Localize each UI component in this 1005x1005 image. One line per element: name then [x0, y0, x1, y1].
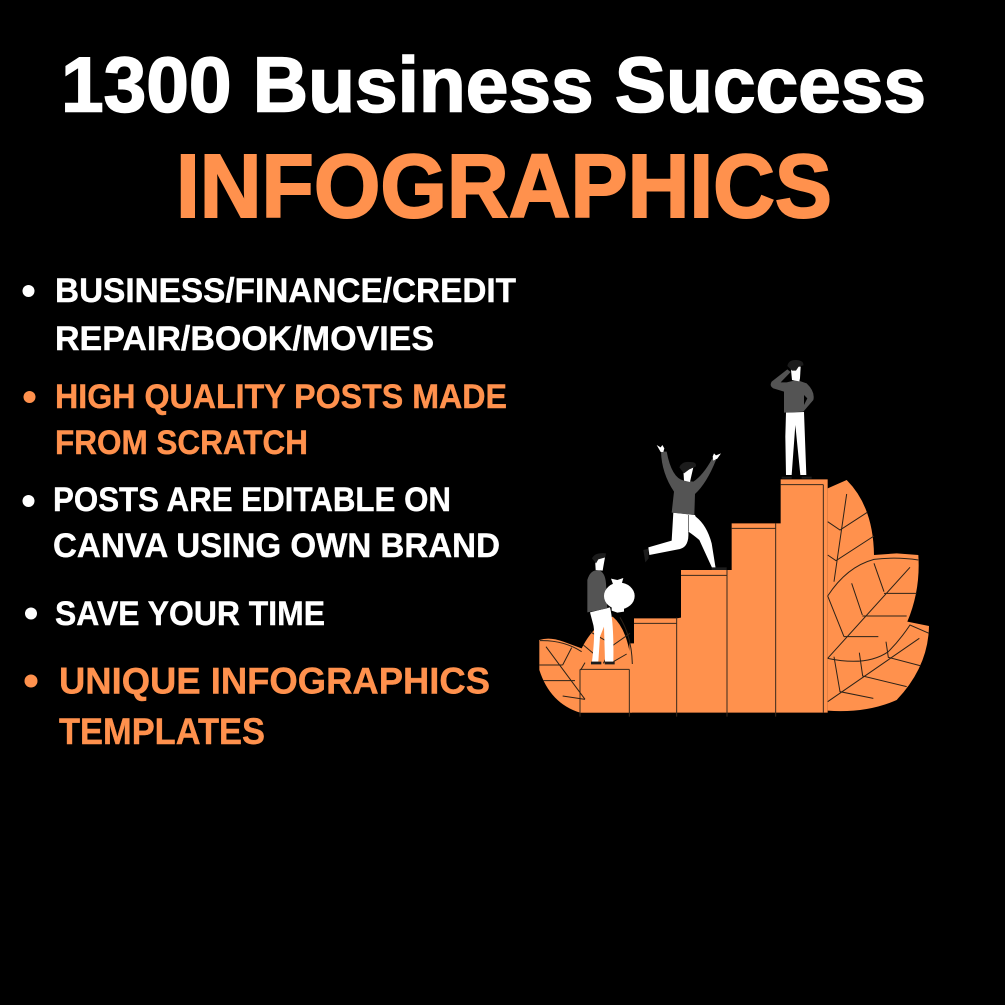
icon: money bag [604, 578, 635, 613]
person: top, looking out [771, 360, 814, 479]
bullet: save your time: SAVE YOUR TIME [55, 595, 325, 633]
title [61, 40, 926, 237]
bullet: high quality posts: FROM SCRATCH [55, 424, 308, 462]
staircase [580, 479, 828, 713]
leaves behind stairs [539, 480, 929, 713]
bullet: unique templates: TEMPLATES [59, 710, 265, 752]
bullet: unique templates [24, 660, 490, 752]
title: INFOGRAPHICS [176, 137, 832, 237]
bullet: editable on canva [22, 481, 500, 565]
bullet: editable on canva: CANVA USING OWN BRAND [53, 527, 500, 565]
title: 1300 Business Success [61, 40, 926, 128]
bullet: unique templates: UNIQUE INFOGRAPHICS [59, 660, 490, 702]
bullet: business niches [22, 272, 516, 358]
stair lines [580, 485, 823, 717]
bullet: business niches: REPAIR/BOOK/MOVIES [55, 320, 434, 358]
bullet: business niches: BUSINESS/FINANCE/CREDIT [55, 272, 516, 310]
bullet: high quality posts: HIGH QUALITY POSTS MADE [55, 378, 507, 416]
leaf veins [539, 494, 929, 702]
person: carrying money bag [587, 553, 635, 664]
bullet: editable on canva: POSTS ARE EDITABLE ON [53, 481, 451, 519]
bullet list [22, 272, 516, 752]
illustration: people climbing stairs [539, 360, 929, 717]
bullet: high quality posts [24, 378, 507, 462]
person: jumping with raised arms [643, 445, 727, 570]
